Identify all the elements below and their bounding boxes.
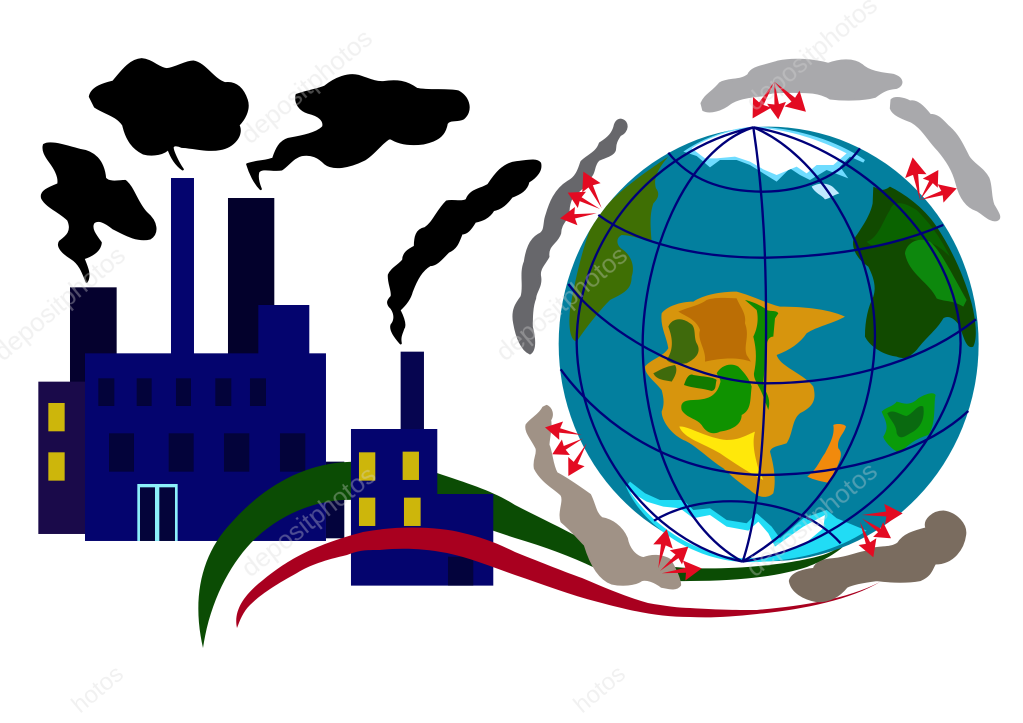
chimney: left dark	[70, 287, 117, 384]
green island	[882, 393, 936, 453]
smoke: left cloud	[42, 143, 155, 282]
factory door	[137, 484, 178, 541]
watermark text: depositphotos	[490, 240, 633, 367]
upper dark windows	[98, 378, 266, 406]
brown cloud: lower right	[790, 512, 965, 601]
red swoosh	[236, 528, 880, 628]
side wing yellow windows	[48, 403, 65, 481]
watermark text: depositphotos	[235, 459, 381, 583]
watermark text: hotos	[67, 660, 129, 719]
smoke: right cloud	[247, 75, 469, 189]
continents	[569, 157, 976, 358]
factory tower block	[258, 305, 309, 355]
globe	[559, 127, 979, 562]
grey cloud: top	[702, 60, 901, 111]
smoke: small chimney plume	[388, 161, 540, 343]
watermark text: depositphotos	[740, 456, 883, 583]
chimney: tall blue	[171, 178, 194, 355]
land: east	[853, 187, 976, 358]
red arrows: top	[743, 74, 813, 124]
dark annex	[326, 462, 344, 538]
red arrows: bottom	[649, 527, 703, 583]
small factory dark door	[448, 557, 473, 586]
main factory hall	[85, 353, 326, 541]
central continent	[645, 292, 845, 497]
smoke: large cloud over tall chimney	[90, 59, 248, 169]
small factory body	[351, 429, 493, 586]
red arrows: upper right	[902, 155, 960, 209]
north polar ice	[683, 127, 865, 199]
grey cloud: upper right	[891, 98, 999, 220]
watermark text: depositphotos	[235, 23, 378, 150]
green swoosh	[198, 461, 853, 648]
ocean	[559, 127, 979, 561]
side wing	[38, 382, 87, 534]
large factory	[38, 178, 344, 541]
small factory	[351, 352, 493, 586]
south polar ice	[626, 482, 867, 562]
red arrows: lower left	[543, 418, 595, 481]
orange island	[807, 424, 846, 483]
watermark text: hotos	[569, 660, 631, 719]
lower dark windows	[109, 433, 305, 472]
small chimney	[401, 352, 424, 430]
dark grey cloud: left	[514, 120, 626, 353]
chimney: wide dark	[228, 198, 274, 355]
latitude and longitude grid	[561, 127, 976, 562]
land: northwest	[569, 157, 668, 342]
taupe cloud: lower left	[526, 406, 680, 588]
small factory yellow windows	[359, 452, 421, 526]
red arrows: lower right	[851, 503, 903, 561]
black smoke clouds	[42, 59, 540, 343]
red arrows: left	[559, 167, 611, 227]
